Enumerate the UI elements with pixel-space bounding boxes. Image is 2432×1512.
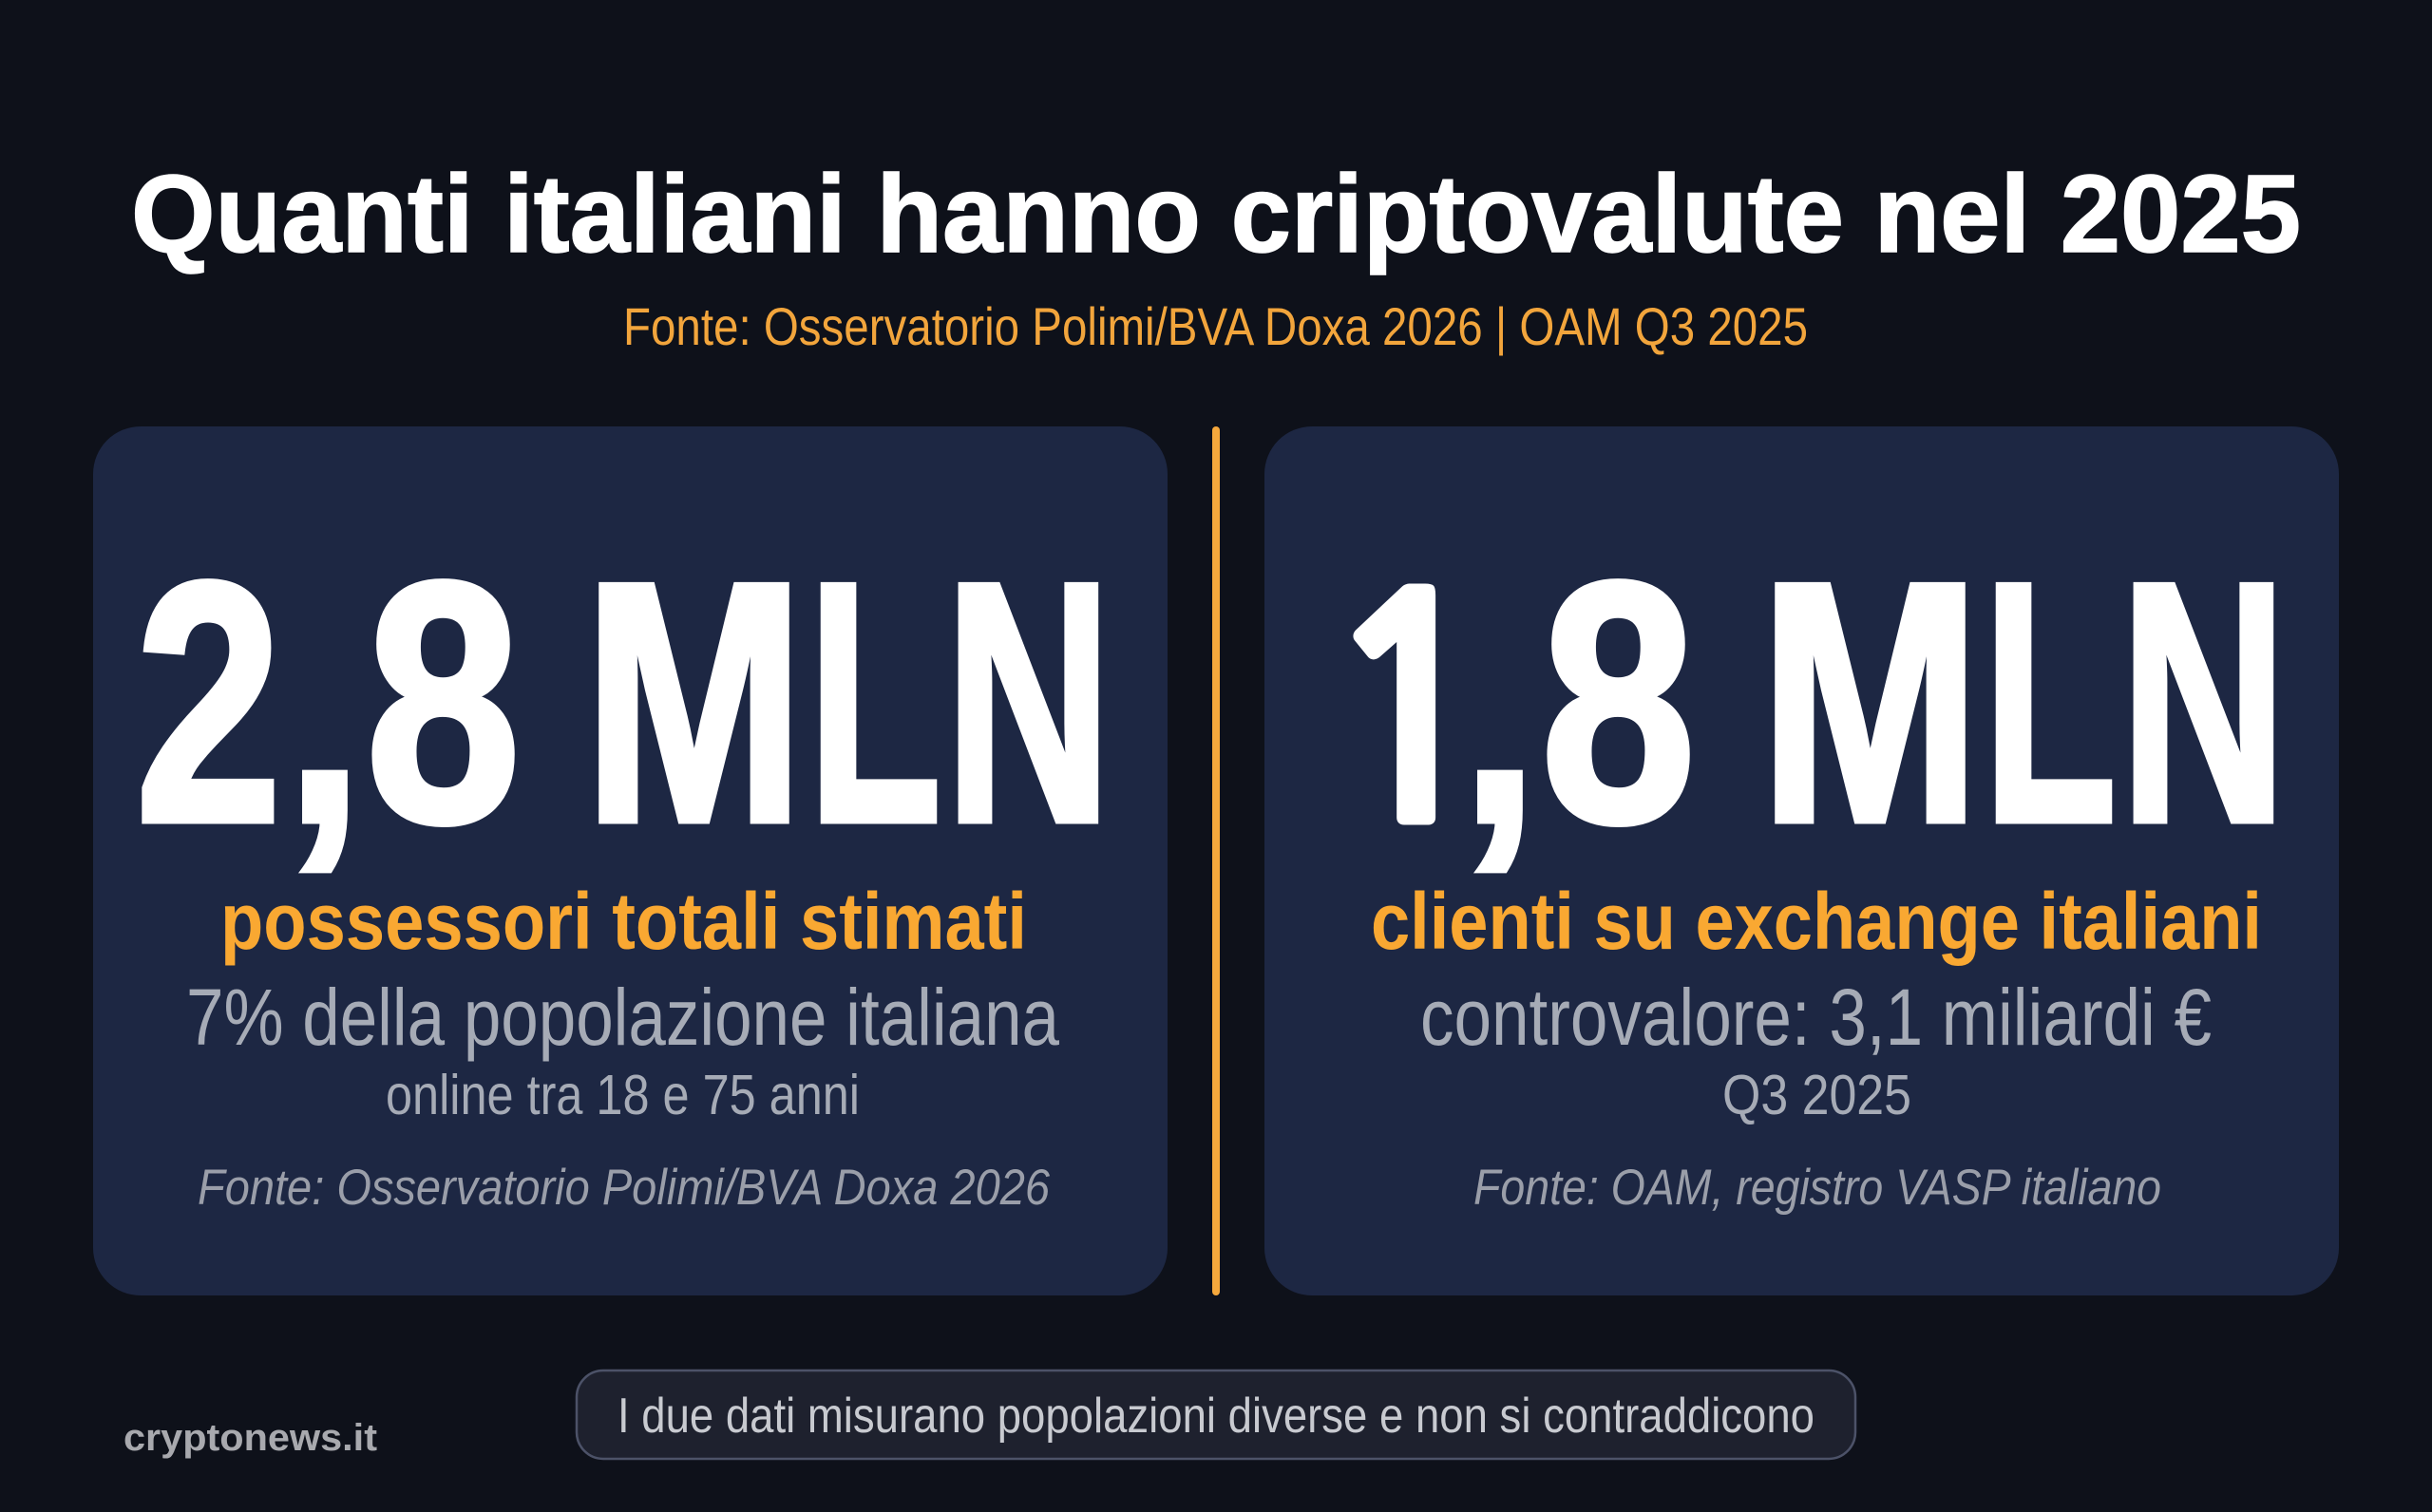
source right: Fonte: OAM, registro VASP italiano: [1473, 1160, 2161, 1216]
big number right: 8: [1541, 512, 1696, 894]
callout text: I due dati misurano popolazioni diverse e non si contraddicono: [618, 1389, 1814, 1444]
period: Q3 2025: [1722, 1064, 1911, 1126]
panel: possessori totali: [93, 426, 1168, 1295]
divider: [1212, 426, 1220, 1295]
brand: cryptonews.it: [124, 1417, 377, 1459]
big number right: ,: [1461, 533, 1539, 888]
big number right: N: [2120, 512, 2287, 894]
countervalue: controvalore: 3,1 miliardi €: [1420, 973, 2212, 1062]
age range: online tra 18 e 75 anni: [386, 1064, 860, 1126]
big number left: M: [583, 512, 805, 894]
big number right: 1: [1318, 562, 1501, 867]
panel background left: [93, 426, 1168, 1295]
subtitle: sources: Fonte: Osservatorio Polimi/BVA Doxa 2026 | OAM Q3 2025: [623, 296, 1808, 356]
share of population: 7% della popolazione italiana: [186, 973, 1059, 1062]
big number right: M: [1759, 512, 1981, 894]
big number left: 8: [366, 512, 521, 894]
callout note: [577, 1370, 1855, 1459]
label left: possessori totali stimati: [220, 877, 1027, 966]
label right: clienti su exchange italiani: [1371, 877, 2262, 966]
source left: Fonte: Osservatorio Polimi/BVA Doxa 2026: [198, 1160, 1050, 1216]
big number left: N: [945, 512, 1112, 894]
big number left: ,: [285, 533, 363, 888]
title: Quanti italiani hanno criptovalute nel 2025: [131, 152, 2301, 275]
big number right: L: [1984, 512, 2117, 894]
big number left: 2: [135, 512, 282, 894]
panel: clienti exchange: [1264, 426, 2339, 1295]
big number left: L: [808, 512, 941, 894]
panel background right: [1264, 426, 2339, 1295]
callout pill: [577, 1370, 1855, 1459]
